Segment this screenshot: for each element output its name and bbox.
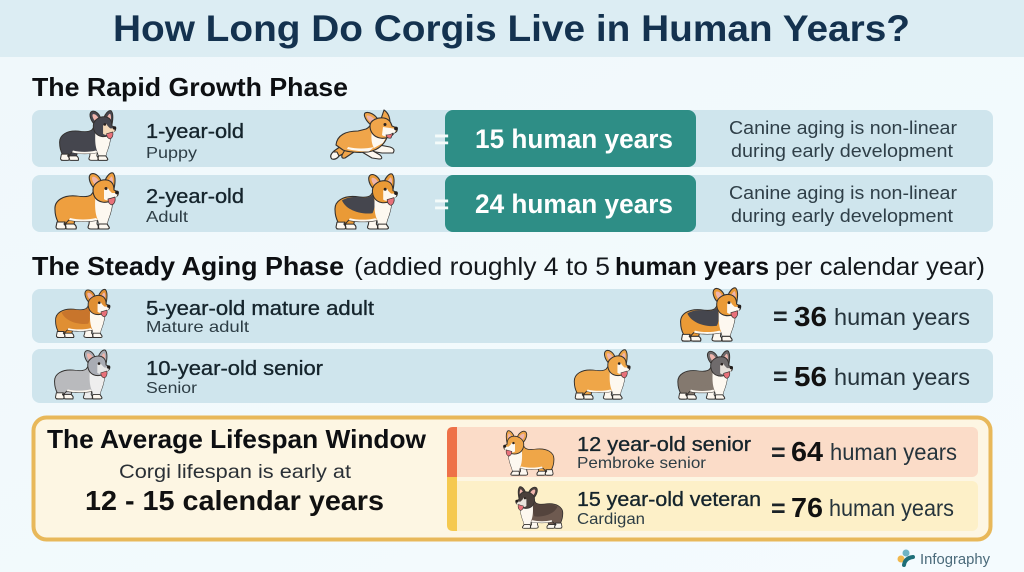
label: 10-year-old senior: Senior [146, 380, 198, 397]
panel: 2-year-old row [32, 173, 993, 232]
icon: tricolor puppy corgi [60, 111, 116, 160]
result: 24 human years: 24 human years [475, 189, 673, 219]
icon: black saddle corgi [335, 174, 398, 229]
text: lifespan note: Corgi lifespan is early at [119, 461, 352, 483]
logo: infography [898, 550, 991, 568]
label: 1-year-old: 1-year-old [146, 121, 244, 143]
label: 10-year-old senior: 10-year-old senior [146, 358, 323, 380]
result: 64 human years: 64 [791, 436, 823, 467]
result: 76 human years: = [771, 495, 786, 523]
panel: 5-year-old row [32, 288, 993, 343]
heading: steady aging phase: per calendar year) [775, 253, 985, 281]
result: 56 human years [773, 361, 970, 392]
label: 12 year-old senior: Pembroke senior [577, 455, 707, 472]
result: 36 human years: = [773, 303, 788, 331]
label: 15 year-old veteran: Cardigan [577, 511, 645, 528]
label: 12 year-old senior: 12 year-old senior [577, 434, 751, 456]
result: 36 human years: human years [834, 304, 970, 330]
panel: 1-year-old row [32, 110, 993, 167]
result: 24 human years: = [434, 189, 449, 219]
row: 15 year-old veteran [447, 477, 978, 531]
heading: steady aging phase: The Steady Aging Phase [32, 251, 344, 281]
label: 1-year-old: Puppy [146, 145, 197, 162]
result: 64 human years: human years [830, 439, 957, 465]
result: 36 human years: 36 [794, 301, 827, 332]
note [729, 117, 957, 161]
heading: steady aging phase [32, 251, 985, 281]
label: 2-year-old: 2-year-old [146, 186, 244, 208]
row: 12 year-old senior [447, 427, 978, 477]
label: 12 year-old senior [577, 434, 751, 472]
label: 2-year-old: Adult [146, 209, 189, 226]
panel: average lifespan window [34, 418, 990, 540]
result: 76 human years: human years [829, 495, 954, 521]
heading: average lifespan window: The Average Lifespan Window [47, 424, 427, 454]
result: 15 human years: = [434, 124, 449, 154]
heading: steady aging phase: human years [615, 253, 769, 281]
header band [0, 0, 1024, 57]
note: during early development [731, 205, 953, 226]
icon: brindle cardigan corgi [515, 487, 563, 528]
icon: black saddle corgi [681, 288, 741, 341]
result: 76 human years [771, 492, 954, 523]
result: 36 human years [773, 301, 970, 332]
label: 2-year-old [146, 186, 244, 226]
result: 56 human years: 56 [794, 361, 827, 392]
note: Canine aging is non-linear [729, 117, 957, 138]
label: 1-year-old [146, 121, 244, 162]
heading: rapid growth phase: The Rapid Growth Phase [32, 72, 348, 102]
icon: gray corgi [55, 350, 110, 399]
note: Canine aging is non-linear [729, 182, 957, 203]
result: 56 human years: = [773, 363, 788, 391]
label: 5-year-old mature adult: Mature adult [146, 319, 250, 336]
note: during early development [731, 140, 953, 161]
icon: running corgi [331, 110, 398, 159]
result: 56 human years: human years [834, 364, 970, 390]
result: 64 human years: = [771, 439, 786, 467]
icon: pembroke corgi [503, 431, 554, 475]
label: 15 year-old veteran: 15 year-old veteran [577, 489, 761, 511]
panel: 10-year-old row [32, 349, 993, 403]
note [729, 182, 957, 226]
label: 15 year-old veteran [577, 489, 761, 528]
result: 24 human years [434, 175, 696, 232]
text: lifespan range: 12 - 15 calendar years [85, 485, 384, 516]
result: 15 human years: 15 human years [475, 124, 673, 154]
icon: orange corgi [574, 350, 631, 399]
label: 5-year-old mature adult: 5-year-old mature adult [146, 298, 374, 320]
result: 64 human years [771, 436, 957, 467]
result: 76 human years: 76 [791, 492, 823, 523]
logo: infography: Infography [920, 552, 991, 568]
icon: orange corgi [55, 173, 119, 229]
result: 15 human years [434, 110, 696, 167]
icon: red corgi [56, 289, 110, 338]
label: 10-year-old senior [146, 358, 323, 397]
icon: gray-brown corgi [678, 351, 733, 399]
label: 5-year-old mature adult [146, 298, 374, 336]
heading: steady aging phase: (addied roughly 4 to 5 [354, 253, 610, 281]
title: How Long Do Corgis Live in Human Years? [113, 8, 910, 49]
